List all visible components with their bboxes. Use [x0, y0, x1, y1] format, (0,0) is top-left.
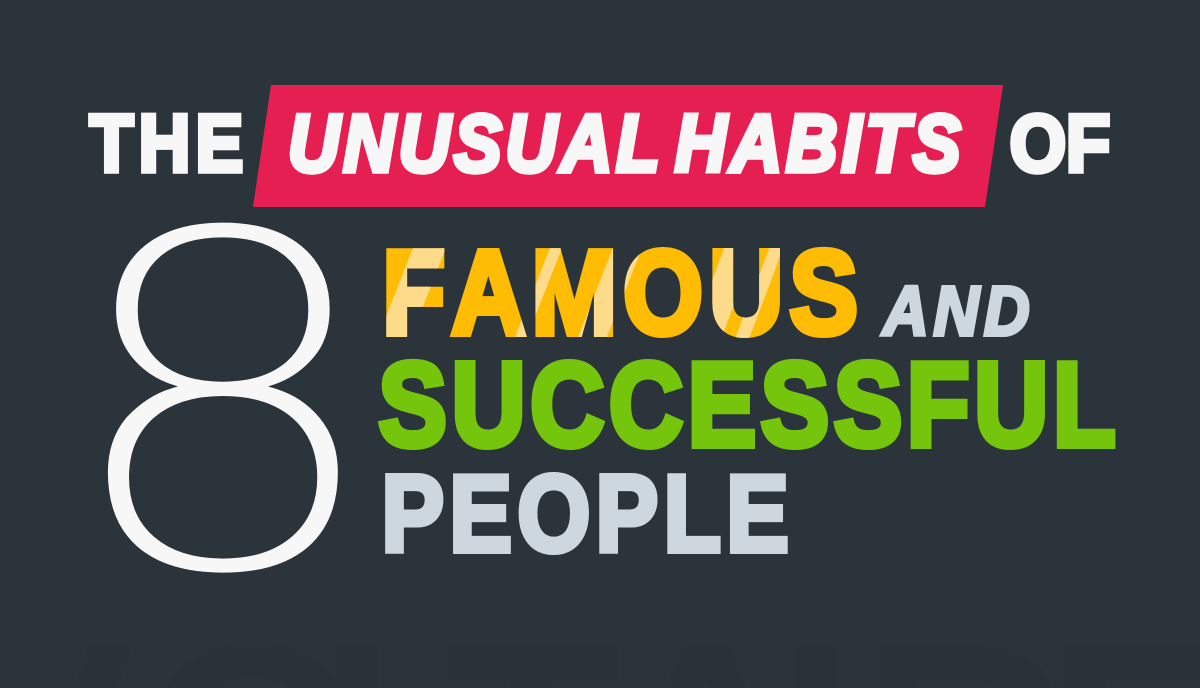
infographic header [88, 85, 1116, 573]
title line: the unusual habits of [90, 85, 1110, 207]
word: AND: AND [881, 273, 1035, 351]
red slanted banner [253, 85, 1003, 207]
word: SUCCESSFUL: SUCCESSFUL [378, 338, 1120, 471]
banner text: HABITS [675, 99, 965, 189]
glossy stripes [378, 246, 784, 339]
word: FAMOUS with glossy stripes [386, 246, 857, 338]
word: OF: OF [1010, 99, 1110, 189]
ghost word at bottom edge [0, 583, 1200, 688]
word: PEOPLE: PEOPLE [382, 452, 794, 575]
word: FAMOUS with glossy stripes: FAMOUS [382, 226, 864, 359]
banner text: UNUSUAL [288, 99, 664, 189]
large outlined numeral 8: 8 [56, 135, 390, 679]
banner text [288, 99, 965, 189]
word: THE: THE [90, 99, 249, 189]
